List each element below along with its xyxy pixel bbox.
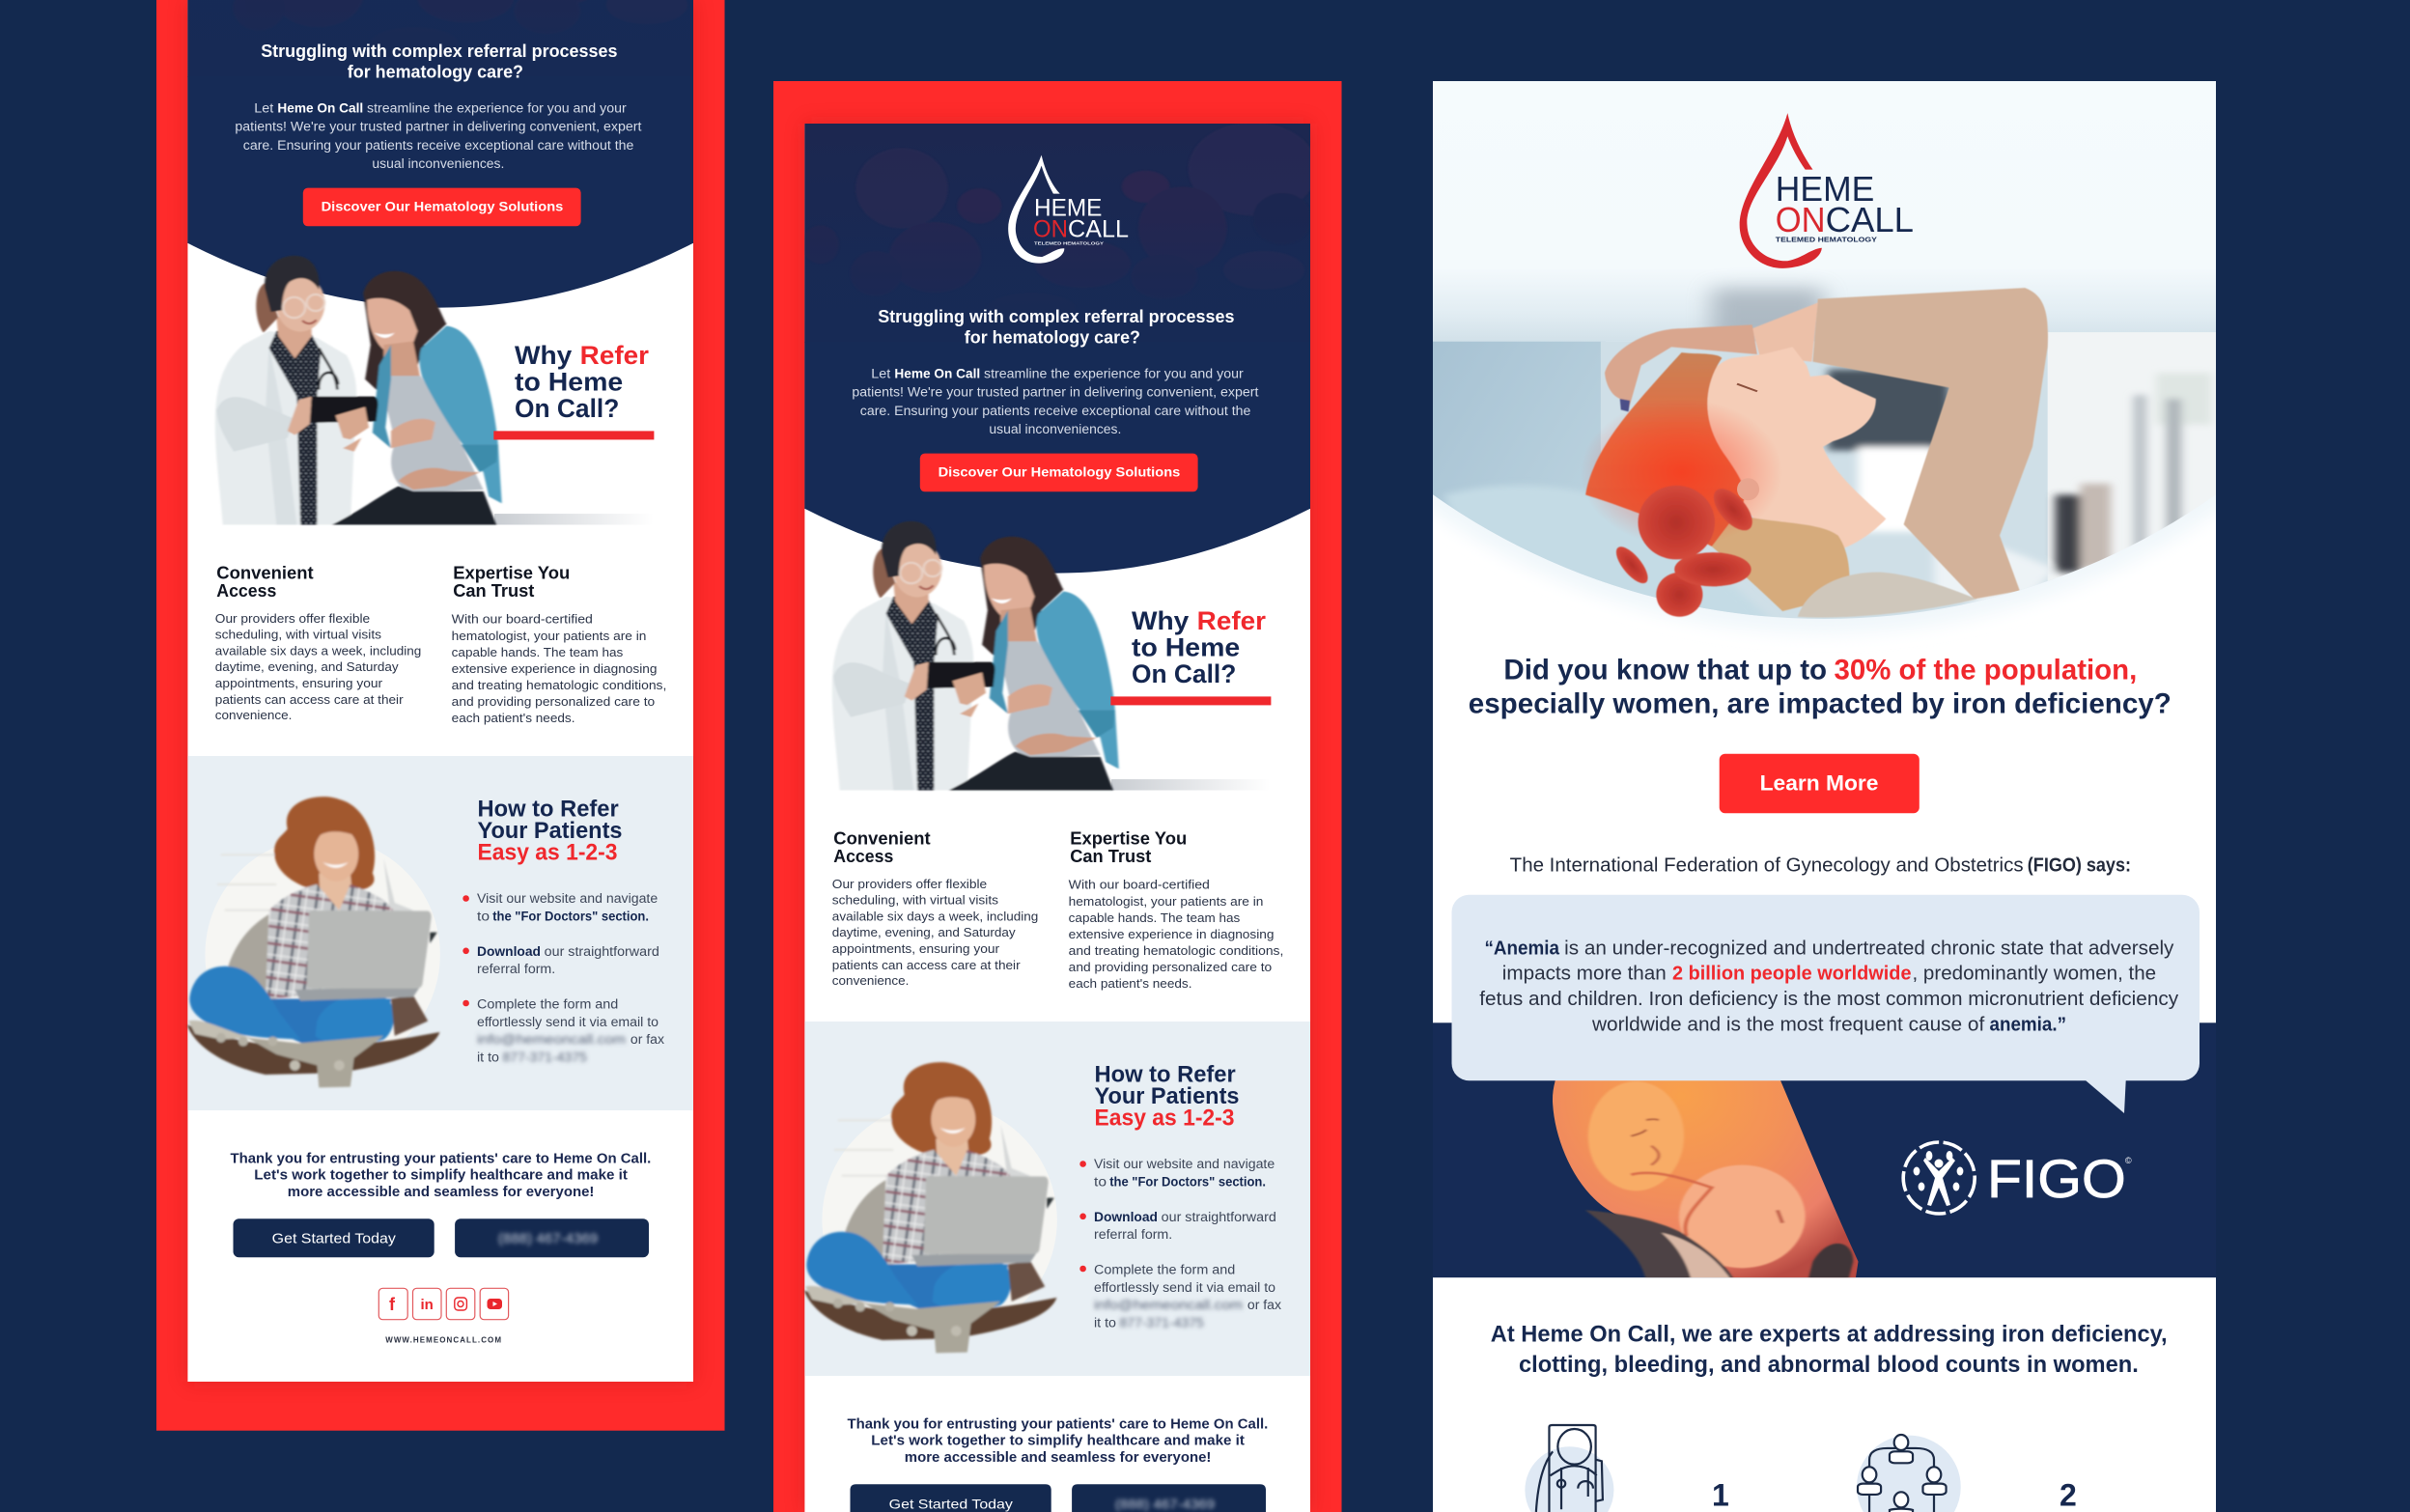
hero photo: woman with headache — [1429, 269, 2221, 637]
photo: doctor and pregnant patient — [215, 256, 654, 525]
number 2: 2 — [2060, 1477, 2077, 1512]
steps list: effortlessly send it via email to — [477, 1015, 659, 1029]
button: get started today middle — [850, 1484, 1051, 1512]
icon: doctor on phone — [1525, 1425, 1613, 1512]
column: expertise you can trust middle: and providing personalized care to — [1069, 960, 1272, 974]
logo: figo — [1903, 1142, 2132, 1214]
column: expertise you can trust: extensive experience in diagnosing — [452, 661, 657, 676]
logo: white heme on call: HEME — [1034, 194, 1102, 221]
column: expertise you can trust — [452, 562, 666, 725]
hero halo — [1433, 81, 2216, 632]
column: convenient access: Our providers offer flexible — [215, 611, 370, 626]
column: expertise you can trust middle: Expertise You — [1070, 827, 1187, 848]
steps list: Visit our website and navigate — [477, 891, 658, 906]
logo: white heme on call — [1008, 155, 1129, 264]
button: get started today — [234, 1218, 434, 1257]
quote bubble: 2 billion people worldwide — [1672, 964, 1912, 985]
heading: did you know: 30% of the population, — [1835, 654, 2137, 686]
column: convenient access: Convenient — [216, 562, 314, 582]
steps list — [462, 891, 664, 1065]
column: convenient access middle: scheduling, with virtual visits — [832, 892, 999, 907]
logo: figo: © — [2125, 1156, 2132, 1165]
red frame middle — [773, 81, 1342, 1512]
steps list: to — [477, 909, 490, 923]
heading: how to refer middle: Easy as 1-2-3 — [1095, 1106, 1234, 1132]
column: convenient access: scheduling, with virtual visits — [215, 627, 382, 641]
column: convenient access middle: convenience. — [832, 973, 909, 988]
thank you message middle — [848, 1416, 1268, 1466]
intro paragraph: usual inconveniences. — [372, 156, 504, 171]
logo: heme on call: HEME — [1776, 169, 1874, 209]
thank you message: Thank you for entrusting your patients' care to Heme On Call. — [230, 1151, 651, 1166]
intro paragraph middle: care. Ensuring your patients receive exceptional care without the — [860, 404, 1250, 418]
blood cell texture — [185, 0, 700, 250]
logo: white heme on call: CALL — [1068, 216, 1129, 243]
heading: why refer middle: Refer — [1197, 606, 1267, 635]
steps list middle: Download — [1094, 1210, 1158, 1224]
quote bubble — [1452, 895, 2200, 1113]
intro paragraph: Let — [254, 100, 274, 115]
steps list middle: Complete the form and — [1094, 1263, 1235, 1276]
quote bubble: is an under-recognized and undertreated chronic state that adversely — [1564, 938, 2173, 959]
figo intro line: The International Federation of Gynecology and Obstetrics — [1510, 855, 2024, 877]
button: phone number blurred middle — [1072, 1484, 1266, 1512]
thank you message: more accessible and seamless for everyone! — [288, 1185, 594, 1200]
intro paragraph — [235, 100, 642, 171]
button: get started today: Get Started Today — [272, 1230, 396, 1246]
navy band — [1433, 1022, 2216, 1277]
section: how to refer background middle — [804, 1022, 1310, 1376]
column: expertise you can trust middle — [1069, 827, 1283, 991]
button: discover solutions — [303, 188, 581, 226]
navy header with curve — [187, 0, 693, 308]
quote bubble: , predominantly women, the — [1912, 964, 2156, 985]
heading: how to refer middle: Your Patients — [1095, 1083, 1240, 1109]
heading: why refer middle: On Call? — [1132, 659, 1236, 688]
quote bubble: fetus and children. Iron deficiency is the most common micronutrient deficiency — [1479, 989, 2178, 1010]
quote bubble: anemia.” — [1989, 1014, 2066, 1035]
column: convenient access middle: daytime, evening, and Saturday — [832, 925, 1016, 939]
column: convenient access middle: Convenient — [833, 827, 931, 848]
quote bubble: impacts more than — [1502, 964, 1667, 985]
intro paragraph middle: Let — [871, 366, 891, 380]
section: how to refer background — [187, 756, 693, 1110]
column: convenient access — [215, 562, 421, 722]
blood cell texture middle — [802, 123, 1317, 516]
steps list middle: info@hemeoncall.com — [1094, 1298, 1243, 1312]
logo: white heme on call: TELEMED HEMATOLOGY — [1034, 240, 1104, 245]
photo: doctor and pregnant patient middle — [832, 521, 1271, 791]
heading: struggling — [261, 41, 618, 81]
steps list middle: referral form. — [1094, 1227, 1172, 1242]
button: phone number (blurred) — [455, 1218, 649, 1257]
thank you message middle: more accessible and seamless for everyone! — [905, 1450, 1211, 1466]
column: convenient access: available six days a week, including — [215, 643, 421, 658]
social icons — [378, 1288, 509, 1320]
steps list middle: effortlessly send it via email to — [1094, 1280, 1275, 1295]
thank you message middle: Thank you for entrusting your patients' care to Heme On Call. — [848, 1416, 1268, 1432]
heading: how to refer: Easy as 1-2-3 — [477, 840, 618, 866]
heading: at heme on call: At Heme On Call, we are experts at addressing iron deficiency, — [1491, 1321, 2168, 1347]
steps list: the "For Doctors" section. — [492, 909, 649, 923]
steps list middle: to — [1094, 1174, 1107, 1189]
heading: struggling middle: Struggling with complex referral processes — [878, 306, 1234, 326]
white body shadow — [187, 0, 693, 1382]
button: learn more — [1720, 754, 1920, 813]
figo intro line: (FIGO) says: — [2028, 855, 2131, 877]
red blood cells — [1611, 485, 1760, 617]
heading: why refer: On Call? — [515, 394, 619, 423]
steps list: info@hemeoncall.com — [477, 1032, 626, 1047]
heading: why refer — [515, 341, 650, 423]
steps list middle: Visit our website and navigate — [1094, 1157, 1275, 1171]
steps list: or fax — [631, 1032, 664, 1047]
icon: care team circle — [1857, 1435, 1961, 1512]
intro paragraph: streamline the experience for you and your — [367, 100, 627, 115]
column: convenient access: patients can access care at their — [215, 692, 404, 707]
column: expertise you can trust: hematologist, your patients are in — [452, 629, 646, 643]
number 1: 1 — [1712, 1477, 1729, 1512]
heading: did you know — [1469, 654, 2172, 719]
logo: heme on call: ON — [1776, 200, 1826, 239]
intro paragraph middle: usual inconveniences. — [989, 422, 1121, 436]
steps list: Download — [477, 944, 541, 959]
column: convenient access middle — [832, 827, 1038, 988]
column: expertise you can trust middle: and treating hematologic conditions, — [1069, 943, 1283, 958]
steps list: it to — [477, 1050, 499, 1065]
button: discover solutions middle — [920, 454, 1198, 491]
heading: struggling: for hematology care? — [348, 62, 523, 81]
quote bubble: worldwide and is the most frequent cause of — [1591, 1014, 1985, 1035]
logo: heme on call: CALL — [1826, 200, 1914, 239]
steps list middle: or fax — [1247, 1298, 1281, 1312]
panel: left email card — [156, 0, 724, 1431]
column: expertise you can trust middle: With our board-certified — [1069, 878, 1210, 892]
steps list middle: our straightforward — [1162, 1210, 1276, 1224]
photo: woman with laptop middle — [804, 1062, 1057, 1353]
white body shadow middle — [804, 124, 1310, 1512]
button: get started today middle: Get Started Today — [889, 1496, 1013, 1511]
column: expertise you can trust middle: extensive experience in diagnosing — [1069, 927, 1275, 941]
button: discover solutions middle: Discover Our Hematology Solutions — [939, 464, 1181, 480]
button: phone number (blurred): (888) 467-4369 — [498, 1230, 598, 1246]
red frame left — [156, 0, 724, 1431]
column: expertise you can trust: capable hands. The team has — [452, 645, 624, 659]
card contents — [773, 81, 1342, 1512]
logo: heme on call: TELEMED HEMATOLOGY — [1776, 238, 1877, 244]
column: expertise you can trust: and providing personalized care to — [452, 694, 655, 709]
heading: at heme on call: clotting, bleeding, and abnormal blood counts in women. — [1519, 1352, 2139, 1378]
logo: figo: FIGO — [1987, 1148, 2126, 1209]
button: learn more: Learn More — [1760, 771, 1879, 796]
heading: how to refer middle — [1095, 1062, 1240, 1132]
thank you message middle: Let's work together to simplify healthcare and make it — [871, 1434, 1245, 1449]
logo: white heme on call: ON — [1033, 216, 1068, 243]
heading: why refer: to Heme — [515, 368, 623, 397]
column: expertise you can trust: and treating hematologic conditions, — [452, 678, 666, 692]
steps list: 877-371-4375 — [502, 1050, 587, 1065]
logo: heme on call — [1740, 113, 1914, 268]
column: expertise you can trust middle: hematologist, your patients are in — [1069, 894, 1263, 909]
button: discover solutions: Discover Our Hematology Solutions — [322, 199, 564, 214]
heading: why refer: Refer — [580, 341, 650, 370]
column: convenient access middle: Our providers offer flexible — [832, 877, 987, 891]
heading: struggling: Struggling with complex referral processes — [261, 41, 618, 61]
column: expertise you can trust middle: each patient's needs. — [1069, 976, 1191, 991]
intro paragraph: Heme On Call — [277, 100, 363, 115]
photo: woman with laptop — [187, 797, 440, 1087]
heading: struggling middle: for hematology care? — [965, 326, 1140, 348]
white email body middle — [804, 124, 1310, 1512]
white lower section — [1433, 1277, 2216, 1278]
heading: why refer middle: to Heme — [1132, 633, 1240, 662]
intro paragraph middle: streamline the experience for you and your — [984, 366, 1244, 380]
column: convenient access middle: appointments, ensuring your — [832, 941, 1000, 956]
website url: WWW.HEMEONCALL.COM — [385, 1335, 501, 1344]
social icons: f — [389, 1295, 396, 1314]
heading: did you know: especially women, are impacted by iron deficiency? — [1469, 687, 2172, 719]
heading: at heme on call — [1491, 1321, 2168, 1378]
thank you message — [230, 1151, 651, 1200]
steps list: referral form. — [477, 962, 555, 976]
column: expertise you can trust: Expertise You — [453, 562, 570, 582]
column: convenient access: convenience. — [215, 708, 292, 722]
steps list: our straightforward — [545, 944, 659, 959]
button: phone number blurred middle: (888) 467-4369 — [1115, 1496, 1215, 1511]
heading: how to refer: Your Patients — [477, 818, 622, 844]
column: expertise you can trust: With our board-certified — [452, 612, 593, 627]
heading: how to refer — [477, 796, 622, 866]
column: convenient access middle: Access — [833, 846, 893, 866]
column: expertise you can trust: Can Trust — [453, 580, 534, 601]
navy header with curve middle — [804, 124, 1310, 574]
column: convenient access middle: available six days a week, including — [832, 909, 1038, 923]
social icons: in — [421, 1297, 434, 1313]
intro paragraph: patients! We're your trusted partner in delivering convenient, expert — [235, 120, 642, 134]
thank you message: Let's work together to simplify healthcare and make it — [254, 1168, 628, 1184]
column: convenient access middle: patients can access care at their — [832, 958, 1021, 972]
red underline bar — [493, 431, 654, 439]
column: convenient access: appointments, ensuring your — [215, 676, 383, 690]
panel: middle email card — [773, 81, 1342, 1512]
column: expertise you can trust middle: Can Trust — [1070, 846, 1151, 866]
intro paragraph middle — [852, 366, 1259, 436]
panel: right email card — [1433, 81, 2216, 1512]
heading: struggling middle — [878, 306, 1234, 348]
column: convenient access: Access — [216, 580, 276, 601]
red underline bar middle — [1110, 696, 1271, 705]
quote bubble: “Anemia — [1485, 938, 1560, 959]
steps list: Complete the form and — [477, 996, 618, 1012]
column: expertise you can trust middle: capable hands. The team has — [1069, 910, 1241, 925]
intro paragraph middle: Heme On Call — [894, 366, 980, 380]
heading: did you know: Did you know that up to — [1503, 654, 1827, 686]
heading: how to refer middle: How to Refer — [1095, 1062, 1236, 1087]
intro paragraph middle: patients! We're your trusted partner in delivering convenient, expert — [852, 385, 1259, 400]
heading: how to refer: How to Refer — [477, 796, 619, 823]
heading: why refer middle: Why — [1132, 606, 1189, 635]
steps list middle — [1079, 1157, 1281, 1330]
intro paragraph: care. Ensuring your patients receive exceptional care without the — [243, 138, 633, 153]
heading: why refer: Why — [515, 341, 572, 370]
steps list middle: it to — [1094, 1316, 1116, 1330]
heading: why refer middle — [1132, 606, 1267, 688]
white email body — [187, 0, 693, 1382]
steps list middle: the "For Doctors" section. — [1109, 1174, 1266, 1189]
white base — [1433, 494, 2216, 1278]
column: convenient access: daytime, evening, and Saturday — [215, 659, 399, 674]
photo: fetus in womb — [1553, 1080, 1858, 1278]
steps list middle: 877-371-4375 — [1120, 1316, 1204, 1330]
column: expertise you can trust: each patient's needs. — [452, 711, 575, 725]
